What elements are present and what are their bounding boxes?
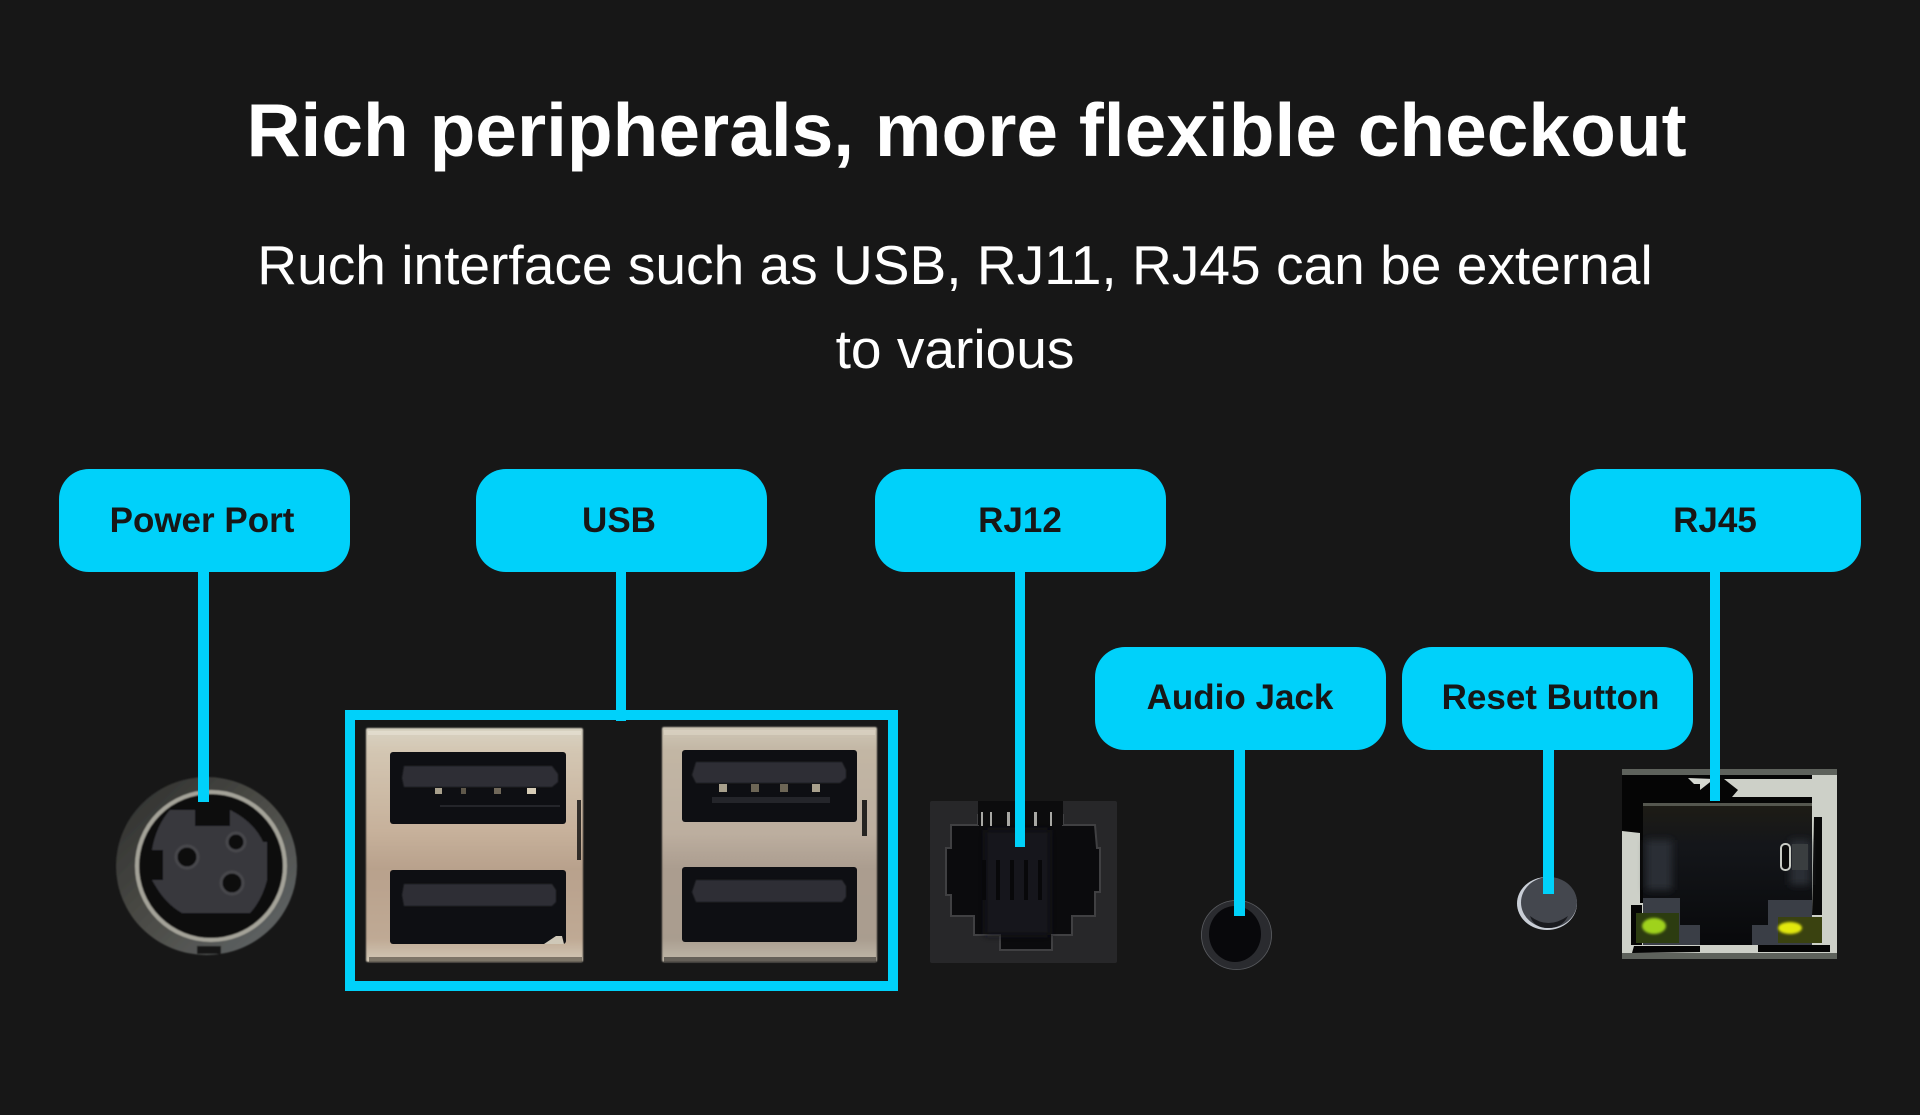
label: Audio Jack [1095, 647, 1386, 750]
label: RJ45: RJ45 [1673, 501, 1757, 540]
label: RJ12 [875, 469, 1166, 572]
icon: USB left port pair [366, 728, 583, 962]
connector line: RJ12 [1015, 572, 1025, 847]
connector line: Audio Jack [1234, 750, 1245, 916]
icon: RJ45 port [1622, 769, 1837, 959]
icon: USB right port pair [662, 727, 877, 962]
title: Rich peripherals, more flexible checkout [246, 88, 1687, 172]
label: Reset Button: Reset Button [1442, 678, 1659, 717]
icon: audio jack [1201, 900, 1272, 970]
label: RJ45 [1570, 469, 1861, 572]
icon: reset button [1517, 877, 1577, 930]
label: Audio Jack: Audio Jack [1147, 678, 1334, 717]
USB highlight frame [350, 715, 893, 986]
connector line: RJ45 [1710, 572, 1720, 801]
subtitle: to various [836, 318, 1074, 380]
label: USB [476, 469, 767, 572]
label: USB: USB [582, 501, 656, 540]
icon: power port [116, 777, 297, 955]
label: RJ12: RJ12 [978, 501, 1062, 540]
connector line: Power Port [198, 572, 209, 802]
icon: RJ12 port [930, 801, 1117, 963]
label: Power Port [59, 469, 350, 572]
subtitle: Ruch interface such as USB, RJ11, RJ45 can be external [257, 234, 1653, 296]
label: Power Port: Power Port [110, 501, 295, 540]
label: Reset Button [1402, 647, 1693, 750]
connector line: USB [616, 572, 626, 721]
connector line: Reset Button [1543, 750, 1554, 894]
